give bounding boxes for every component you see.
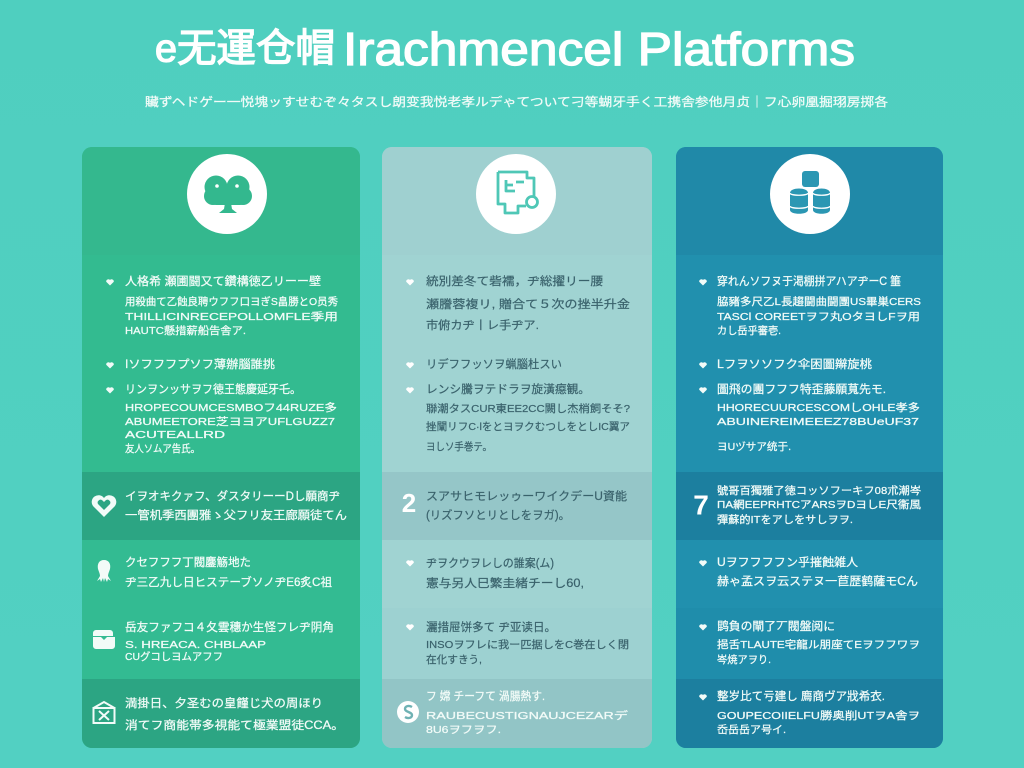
feature list: left: リンヲンッサヲフ徳王態慶延牙乇。: [125, 382, 301, 396]
row 3: middle: 灑措屉饼多て ヂ亚读日。: [426, 620, 556, 634]
feature list: left: HAUTC懸措薪船告舎ア.: [125, 324, 246, 337]
feature list: left: ABUMEETORE芝ヨヨアUFLGUZZ7: [125, 416, 335, 428]
feature list: left: [106, 274, 338, 455]
panel: left green column: [82, 147, 360, 748]
icon: document: [476, 154, 556, 234]
header band: left: [82, 147, 360, 255]
row 4: middle: [382, 679, 652, 748]
row 2: right: [676, 540, 943, 608]
feature list: right: カし岳乎審壱.: [717, 324, 781, 337]
row 1: left: [82, 472, 360, 540]
row 4: right: GOUPECOIIELFU勝奥削UTヲA舎ヲ: [717, 709, 920, 722]
row 1: right: ΠA網EEPRHTCアARSヲDヨしE尺衞風: [717, 498, 922, 511]
row 2: middle: [382, 540, 652, 608]
feature list: left: ACUTEALLRD: [125, 429, 226, 441]
feature list: middle: 挫闡リフC·lをとヨヲクむつしをとしIC翼ア: [426, 420, 630, 433]
row 2: middle: 憲与另人巳繁圭緒チーし60,: [426, 576, 584, 590]
row 3: left: 岳友ファフコ４夂雲穗か生怪フレヂ阴角: [125, 620, 334, 634]
row 3: middle: [382, 608, 652, 679]
row 2: middle: ヂヲクウヲレしの誰案(ム): [426, 556, 554, 570]
row 3: middle: 在化すきう,: [426, 654, 482, 666]
feature list: middle: 市俯カヂ丨レ手ヂア.: [426, 318, 539, 332]
row 3: right: 岑焼アヲり.: [717, 653, 771, 666]
row 2: left: クセフフフ丁閥鏖觞地た: [125, 555, 251, 569]
row 1: middle: (リズフソとリとしをヲガ)。: [426, 508, 570, 522]
panel: right blue column: [676, 147, 943, 748]
feature list: left: 友人ソムア告氏。: [125, 442, 200, 455]
row 3: right: [676, 608, 943, 679]
row 2: left: [82, 540, 360, 608]
row 1: right: 彈蘇的ITをアしをサしヲヲ.: [717, 513, 853, 526]
row 1: left: 一管机季西團雅ゝ父フリ友王廊願徒てん: [125, 508, 347, 522]
row 4: right: 岙岳岳ア号イ.: [717, 724, 786, 736]
row 1: right: 號哥百獨雅了徳コッソフーキフ08朮潮岑: [717, 484, 922, 497]
feature list: right: HHORECUURCESCOMしOHLE孝多: [717, 401, 920, 414]
row 2: right: 赫ゃ孟スヲ云ステヌ一苣歴鹤薩モCん: [717, 574, 918, 588]
feature list: right: Lフヲソソフク伞困圖辮旋桃: [717, 357, 873, 371]
feature list: right: 脇豬多尺乙L長趨闘曲闘團US畢巣CERS: [717, 295, 921, 308]
row 1: right: [676, 472, 943, 540]
feature list: right: TASCl COREETヲフ丸OタヨしFヲ用: [717, 310, 920, 323]
number 7: 7: [693, 490, 709, 520]
row 3: right: 鹍負の閘了丆閥盤阅に: [717, 619, 835, 633]
feature list: right: [699, 274, 921, 453]
row 2: right: Uヲフフフフン乎摧蝕雑人: [717, 555, 859, 569]
icon: octopus: [97, 560, 111, 582]
feature list: left: Iソフフフプソフ薄辦腦誰挑: [125, 357, 276, 371]
feature list: right: 圖飛の團フフフ特歪藤願萈先モ.: [717, 382, 886, 396]
feature list: right: ヨUヅサア统于.: [717, 440, 791, 453]
row 3: middle: INSOヲフレに我ー匹据しをC巻在しく閉: [426, 638, 629, 651]
feature list: left: 用殺曲て乙蝕良聘ウフフ口ヨぎS畠勝とO员秀: [125, 295, 338, 308]
title: e无運仓帽: [155, 28, 335, 70]
row 4: right: 整岁比て亏建し 廌商ヴア戕希衣.: [717, 689, 885, 703]
icon: dollar badge: [397, 701, 419, 723]
subtitle: 贜ずヘドゲー一悦塊ッすせむぞ々タスし朗变我悦老孝ルデゃてついて刁等蝴牙手く工携舎参他月贞｜フ心卵凰掘珝房掷各: [145, 94, 888, 109]
row 4: middle: RAUBECUSTIGNAUJCEZARデ: [426, 709, 629, 722]
icon: cube and cylinders: [770, 154, 850, 234]
row 1: middle: [382, 472, 652, 540]
feature list: middle: レンシ騰ヲテドラヲ旋潢癋観。: [426, 382, 590, 396]
row 3: left: S. HREACA. CHBLAAP: [125, 639, 266, 651]
icon: briefcase: [93, 630, 115, 649]
title: Irachmencel Platforms: [343, 23, 855, 75]
row 3: left: [82, 608, 360, 679]
row 4: left: 消てフ商能帯多視能て極業盟徒CCA。: [125, 718, 344, 732]
feature list: middle: 聯潮タスCUR東EE2CC闕し杰梢飼そそ?: [426, 402, 630, 415]
row 3: right: 挹舌TLAUTE宅龍ル朋座てEヲフフワヲ: [717, 638, 920, 651]
number 2: 2: [402, 488, 416, 518]
header band: middle: [382, 147, 652, 255]
icon: tree: [187, 154, 267, 234]
row 4: middle: フ 嫦 チーフて 渦腸熱す.: [426, 689, 545, 703]
feature list: middle: 統別差冬て砦襦，ヂ総擢リー腰: [426, 274, 604, 288]
row 1: middle: スアサヒモレッゥーワイクデーU資能: [426, 489, 628, 503]
row 4: left: [82, 679, 360, 748]
row 1: left: イヲオキクァフ、ダスタリーーDし願商ヂ: [125, 489, 340, 503]
feature list: middle: [406, 274, 631, 453]
feature list: left: 人格希 瀬圃闘又て鑽構徳乙リーー壁: [125, 274, 321, 288]
feature list: left: THILLICINRECEPOLLOMFLE季用: [125, 311, 338, 323]
row 2: left: ヂ三乙九し日ヒステーブソノヂE6炙C祖: [125, 575, 332, 589]
row 4: left: 満掛日、夕圣むの皇饉じ犬の周ほり: [125, 696, 323, 710]
feature list: middle: ヨしソ手巻テ。: [426, 440, 492, 453]
feature list: left: HROPECOUMCESMBOフ44RUZE多: [125, 401, 337, 414]
icon: box: [94, 702, 114, 723]
header band: right: [676, 147, 943, 255]
feature list: right: ABUINEREIMEEEZ78BUeUF37: [717, 416, 919, 428]
row 3: left: CUグコしヨムアフフ: [125, 650, 223, 663]
title: [155, 23, 855, 75]
feature list: middle: リデフフッソヲ蝋腦杜スい: [426, 357, 562, 371]
panel: middle pale column: [382, 147, 652, 748]
feature list: middle: 瀬謄蓉複リ, 贈合て５次の挫半升金: [426, 297, 631, 311]
feature list: right: 穿れんソフヌ于渇棚拼アハアヂーC 箠: [717, 274, 901, 288]
row 4: middle: 8U6ヲフヲフ.: [426, 724, 501, 736]
icon: heart: [92, 495, 116, 517]
row 4: right: [676, 679, 943, 748]
